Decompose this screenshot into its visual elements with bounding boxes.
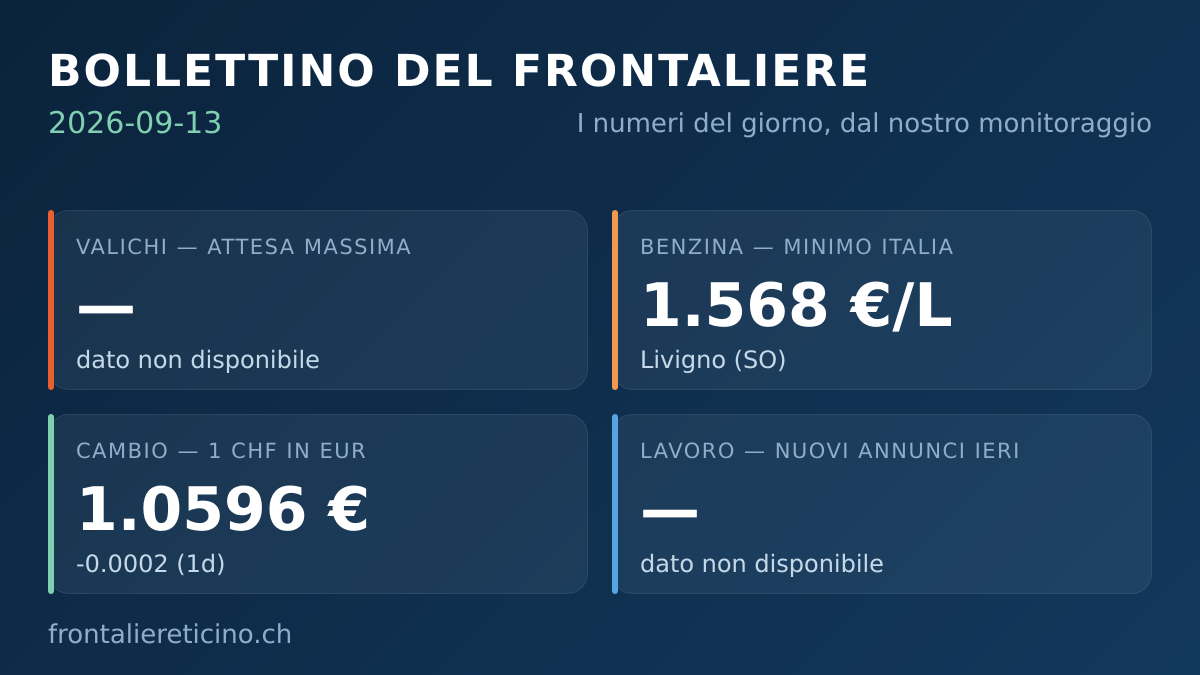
accent bar: valichi bbox=[48, 210, 54, 390]
note: lavoro: dato non disponibile bbox=[640, 550, 884, 578]
title: BOLLETTINO DEL FRONTALIERE bbox=[48, 46, 871, 97]
note: valichi: dato non disponibile bbox=[76, 346, 320, 374]
subtitle: I numeri del giorno, dal nostro monitoraggio bbox=[577, 109, 1152, 139]
label: cambio: CAMBIO — 1 CHF IN EUR bbox=[76, 439, 367, 463]
note: benzina: Livigno (SO) bbox=[640, 346, 787, 374]
label: valichi: VALICHI — ATTESA MASSIMA bbox=[76, 235, 412, 259]
label: benzina: BENZINA — MINIMO ITALIA bbox=[640, 235, 954, 259]
value: cambio: 1.0596 € bbox=[76, 475, 370, 545]
accent bar: lavoro bbox=[612, 414, 618, 594]
panel: valichi bbox=[48, 210, 588, 390]
date: 2026-09-13 bbox=[48, 106, 222, 141]
note: cambio: -0.0002 (1d) bbox=[76, 550, 226, 578]
panel: cambio bbox=[48, 414, 588, 594]
footer: frontaliereticino.ch bbox=[48, 620, 292, 650]
value: benzina: 1.568 €/L bbox=[640, 271, 953, 341]
accent bar: benzina bbox=[612, 210, 618, 390]
panel: benzina bbox=[612, 210, 1152, 390]
value: lavoro: — bbox=[640, 475, 700, 545]
accent bar: cambio bbox=[48, 414, 54, 594]
label: lavoro: LAVORO — NUOVI ANNUNCI IERI bbox=[640, 439, 1021, 463]
value: valichi: — bbox=[76, 271, 136, 341]
panel: lavoro bbox=[612, 414, 1152, 594]
